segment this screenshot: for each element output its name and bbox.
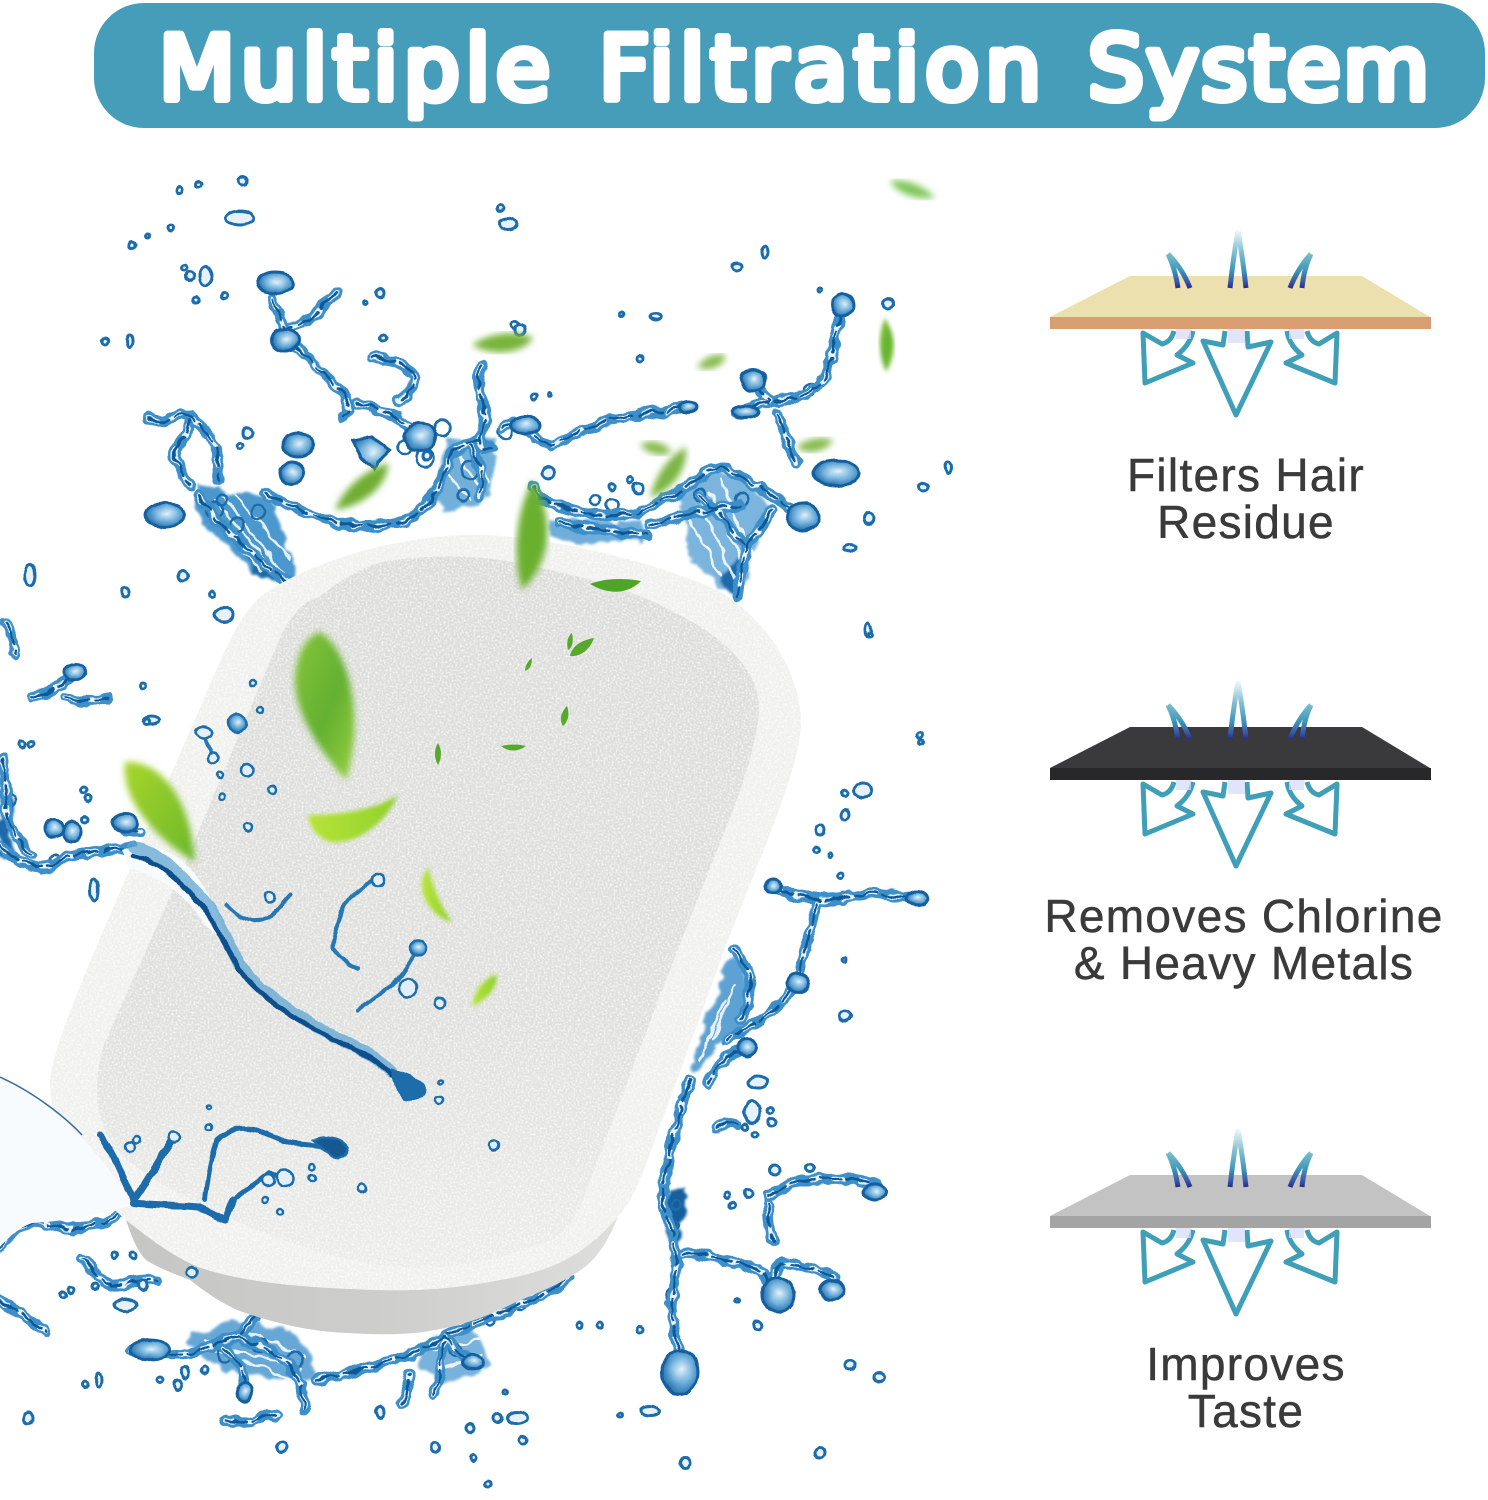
main water stream xyxy=(100,732,418,1220)
filter layer 2: chlorine and heavy metals xyxy=(1044,681,1444,989)
leaf xyxy=(590,579,641,592)
loose water droplets xyxy=(19,177,951,1487)
label: & Heavy Metals xyxy=(1074,937,1414,989)
filter sheet xyxy=(1050,1175,1431,1228)
pad top face rim xyxy=(50,535,801,1290)
spray edge line xyxy=(0,1077,82,1135)
filter layer 1: hair residue xyxy=(1050,230,1431,548)
outflow arrows xyxy=(1143,780,1337,866)
leaf xyxy=(295,632,354,780)
label: Taste xyxy=(1188,1385,1304,1437)
filter layer 3: taste xyxy=(1050,1129,1431,1437)
leaf xyxy=(308,795,398,842)
title text: Filtration xyxy=(599,17,1041,120)
title text: Multiple xyxy=(159,17,550,120)
pad side wall xyxy=(126,1205,622,1334)
leaf xyxy=(472,333,533,352)
leaf xyxy=(517,480,547,590)
title text xyxy=(159,17,1429,120)
water splash over the filter pad xyxy=(0,680,499,1277)
leaf xyxy=(335,463,388,510)
outflow arrows xyxy=(1143,1228,1337,1314)
label: Removes Chlorine xyxy=(1044,890,1444,942)
leaf xyxy=(890,180,935,198)
pad foam texture xyxy=(50,535,801,1290)
inflow streams xyxy=(1168,681,1311,739)
leaf xyxy=(125,762,195,862)
water splash strands behind the filter pad xyxy=(0,293,917,1422)
pad inner felt area xyxy=(97,557,759,1268)
droplets on pad xyxy=(125,680,499,1277)
filled water blobs xyxy=(45,272,928,1402)
tiny leaves xyxy=(435,633,594,765)
leaf xyxy=(880,318,894,372)
filter pad xyxy=(50,535,801,1334)
leaf xyxy=(422,866,452,922)
white spray veils xyxy=(0,846,228,1247)
leaf xyxy=(697,354,726,369)
title banner xyxy=(94,3,1485,128)
inflow streams xyxy=(1168,230,1311,288)
leaf xyxy=(640,441,672,455)
inflow streams xyxy=(1168,1129,1311,1187)
green leaves xyxy=(125,180,935,1007)
leaf xyxy=(472,975,497,1007)
white streaks in the water mass xyxy=(205,445,755,1378)
filter sheet xyxy=(1050,727,1431,780)
label: Residue xyxy=(1157,496,1335,548)
outflow arrows xyxy=(1143,329,1337,415)
filter sheet xyxy=(1050,276,1431,329)
label: Filters Hair xyxy=(1127,449,1365,501)
leaf xyxy=(796,438,833,452)
title text: System xyxy=(1088,17,1429,120)
water mass behind the filter pad xyxy=(0,437,772,1385)
lace rings inside the splash xyxy=(4,372,850,1368)
leaf xyxy=(650,447,686,498)
label: Improves xyxy=(1146,1338,1346,1390)
